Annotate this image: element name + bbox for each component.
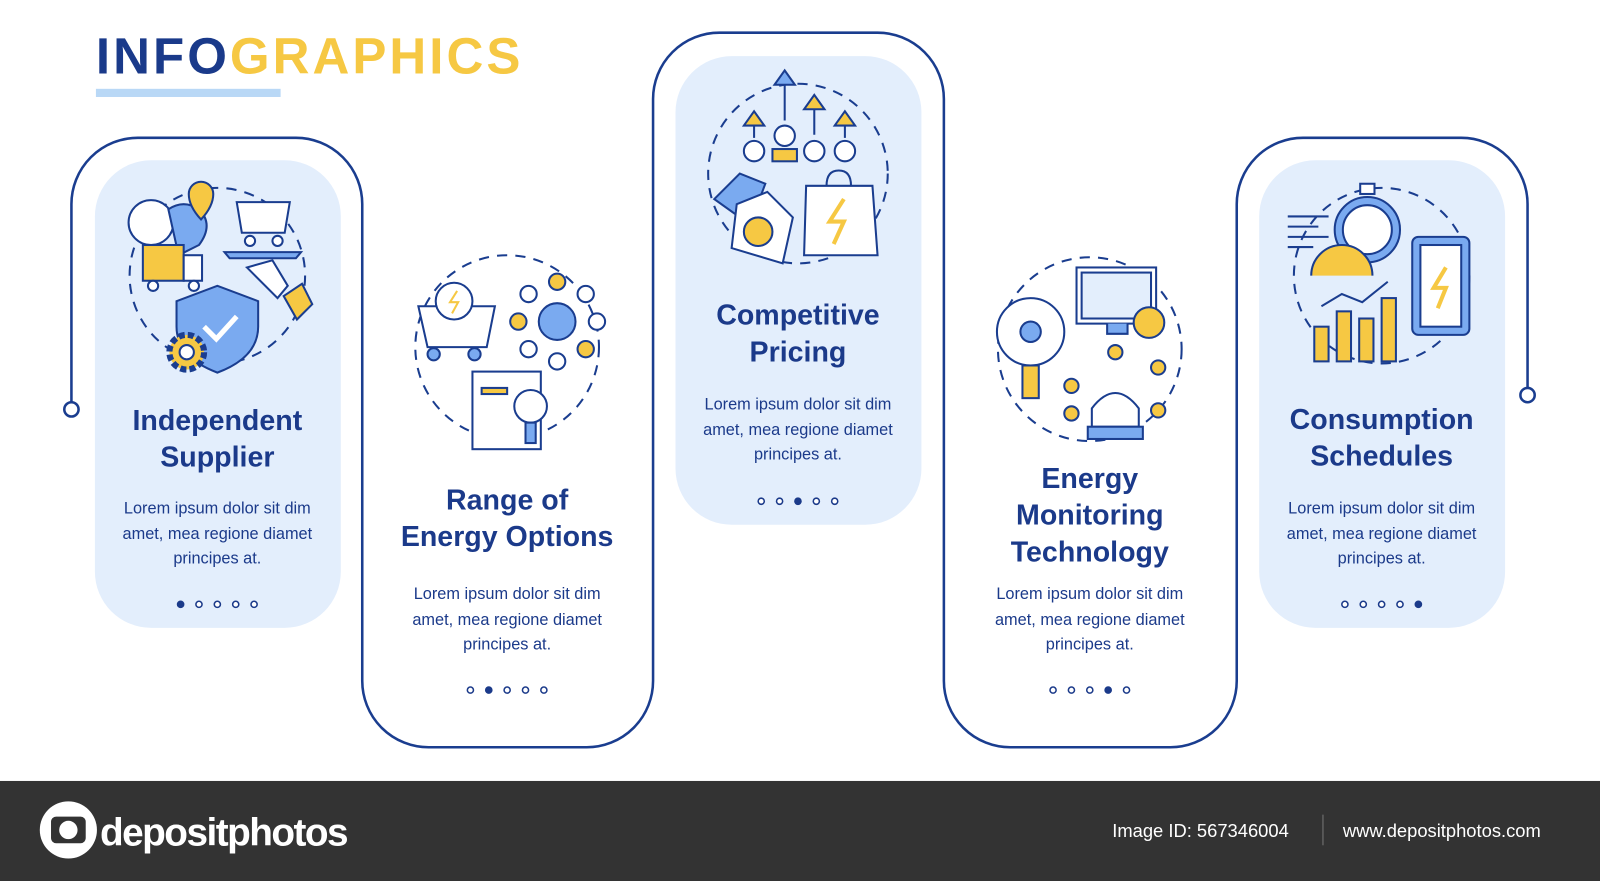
icon: energy monitoring bbox=[997, 257, 1182, 441]
text: panel 5: Schedules bbox=[1310, 441, 1453, 473]
title: INFOGRAPHICS bbox=[96, 27, 520, 85]
footer: depositphotos bbox=[100, 811, 347, 854]
text: panel 1: Independent bbox=[132, 405, 303, 437]
text: panel 3: Lorem ipsum dolor sit dim bbox=[705, 395, 891, 413]
text: panel 4: Technology bbox=[1011, 536, 1169, 568]
text: panel 5: amet, mea regione diamet bbox=[1287, 525, 1477, 543]
panel backgrounds bbox=[95, 56, 1505, 628]
text: panel 4: Monitoring bbox=[1016, 500, 1164, 532]
footer: www.depositphotos.com bbox=[1342, 820, 1541, 841]
text: panel 5: Consumption bbox=[1290, 404, 1474, 436]
icon: competitive pricing bbox=[708, 70, 888, 263]
footer: Image ID: 567346004 bbox=[1112, 820, 1289, 841]
pagination dots bbox=[178, 498, 1421, 693]
text: panel 1 bbox=[123, 405, 313, 568]
text: panel 2: amet, mea regione diamet bbox=[412, 611, 602, 629]
text: panel 1: Supplier bbox=[160, 442, 274, 474]
text: panel 5 bbox=[1287, 404, 1477, 568]
text: panel 4: amet, mea regione diamet bbox=[995, 611, 1185, 629]
icon: consumption schedules bbox=[1288, 184, 1469, 363]
text: panel 1: amet, mea regione diamet bbox=[123, 525, 313, 543]
text: panel 2: Lorem ipsum dolor sit dim bbox=[414, 585, 601, 603]
text: panel 3 bbox=[703, 300, 893, 463]
text: panel 4: Lorem ipsum dolor sit dim bbox=[996, 585, 1183, 603]
icon: range of energy options bbox=[415, 255, 605, 449]
text: panel 3: principes at. bbox=[754, 445, 842, 463]
text: panel 3: Competitive bbox=[716, 300, 880, 332]
text: panel 4: Energy bbox=[1041, 463, 1138, 495]
footer bbox=[0, 781, 1600, 881]
text: panel 5: principes at. bbox=[1338, 550, 1426, 568]
text: panel 2: Range of bbox=[446, 484, 569, 516]
text: panel 5: Lorem ipsum dolor sit dim bbox=[1288, 499, 1475, 517]
snake outline bbox=[64, 33, 1535, 747]
text: panel 2: Energy Options bbox=[401, 521, 613, 553]
text: panel 1: principes at. bbox=[173, 550, 261, 568]
text: panel 3: amet, mea regione diamet bbox=[703, 421, 893, 439]
text: panel 4 bbox=[995, 463, 1185, 653]
text: panel 1: Lorem ipsum dolor sit dim bbox=[124, 499, 311, 517]
text: panel 3: Pricing bbox=[750, 336, 846, 368]
icon: independent supplier bbox=[129, 182, 312, 373]
text: panel 2 bbox=[401, 484, 613, 653]
text: panel 4: principes at. bbox=[1046, 635, 1134, 653]
text: panel 2: principes at. bbox=[463, 635, 551, 653]
